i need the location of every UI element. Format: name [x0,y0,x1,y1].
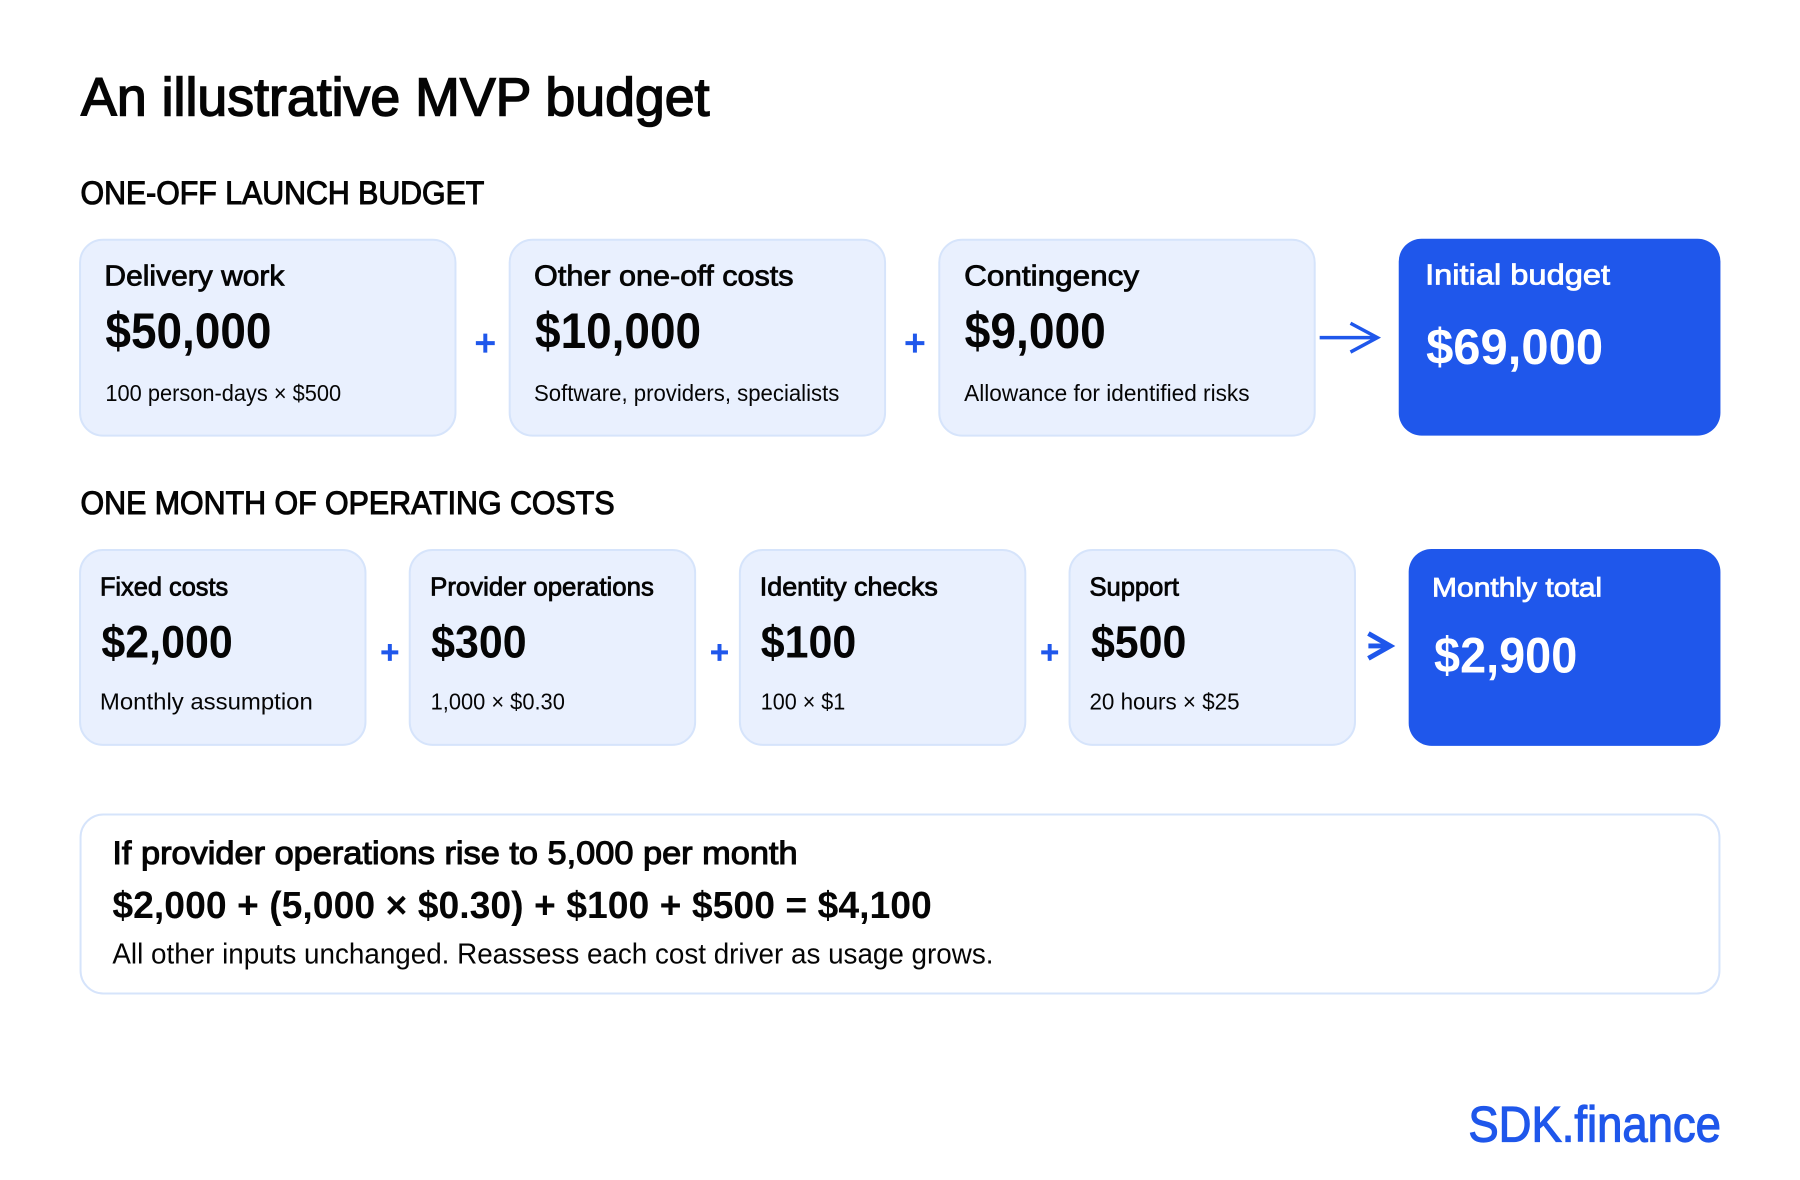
title: An illustrative MVP budget [81,67,710,127]
panel: delivery work: 100 person-days × $500 [105,380,341,406]
icon: plus [905,334,924,353]
arrow: to initial budget [1320,323,1377,352]
panel: initial budget total: Initial budget [1425,259,1610,291]
scenario note: All other inputs unchanged. Reassess each cost driver as usage grows. [112,939,993,971]
panel: delivery work: $50,000 [105,303,271,359]
panel: contingency: $9,000 [965,303,1106,359]
panel: fixed costs: Fixed costs [100,574,228,602]
panel: delivery work: Delivery work [104,260,285,292]
panel: monthly total: Monthly total [1432,573,1602,603]
panel: provider operations: 1,000 × $0.30 [431,689,565,715]
panel: support: Support [1089,574,1179,602]
arrow: to monthly total [1368,634,1390,658]
icon: plus [1041,644,1058,661]
panel: identity checks [740,550,1025,745]
logo: SDK.finance: SDK.finance [1468,1097,1721,1153]
panel: other one-off costs: Other one-off costs [534,260,794,292]
panel: provider operations scenario [81,815,1719,994]
panel: fixed costs: $2,000 [101,616,233,667]
icon: plus [381,644,398,661]
panel: other one-off costs: $10,000 [535,303,701,359]
icon: plus [711,644,728,661]
panel: fixed costs [80,550,365,745]
scenario equation: $2,000 + (5,000 × $0.30) + $100 + $500 = $4,100 [112,885,932,927]
panel: other one-off costs [510,240,885,436]
panel: provider operations: Provider operations [430,574,654,602]
panel: identity checks: 100 × $1 [761,689,845,715]
panel: contingency [939,240,1315,436]
panel: provider operations: $300 [431,616,527,667]
panel: contingency: Allowance for identified risks [964,380,1250,406]
panel: fixed costs: Monthly assumption [100,689,313,715]
scenario heading: If provider operations rise to 5,000 per month [112,834,798,871]
panel: initial budget total [1399,239,1720,436]
panel: support [1070,550,1355,745]
icon: plus [476,334,495,353]
panel: support: 20 hours × $25 [1089,689,1240,715]
panel: initial budget total: $69,000 [1426,319,1603,375]
panel: other one-off costs: Software, providers, specialists [534,380,839,406]
heading: one month of operating costs: ONE MONTH OF OPERATING COSTS [81,484,615,521]
panel: contingency: Contingency [964,260,1140,292]
panel: monthly total [1409,549,1720,746]
panel: identity checks: $100 [761,616,856,667]
heading: one-off launch budget: ONE-OFF LAUNCH BUDGET [81,174,484,211]
panel: monthly total: $2,900 [1434,627,1577,683]
panel: identity checks: Identity checks [760,574,938,602]
panel: delivery work [80,240,455,436]
panel: support: $500 [1091,616,1186,667]
panel: provider operations [410,550,695,745]
